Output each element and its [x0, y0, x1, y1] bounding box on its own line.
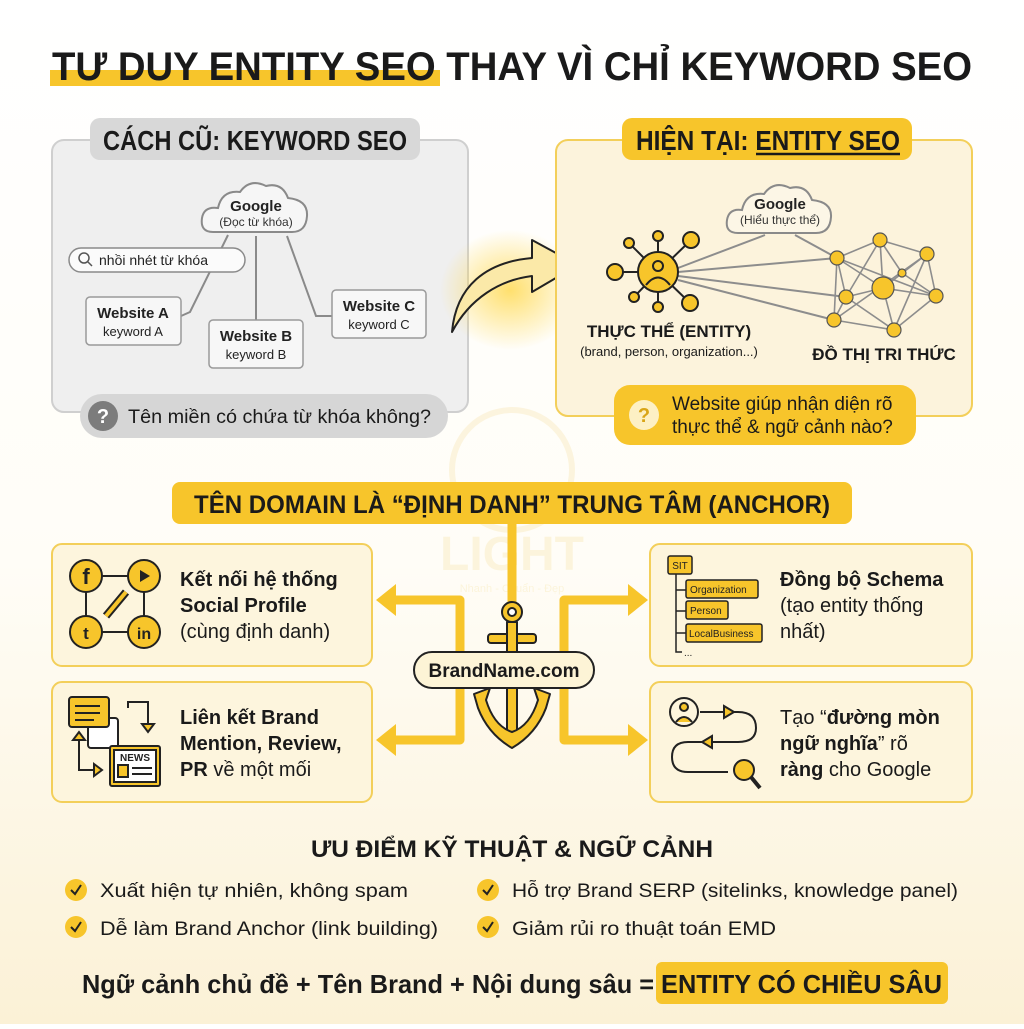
heading: advantages: ƯU ĐIỂM KỸ THUẬT & NGỮ CẢNH [311, 834, 713, 863]
question pill: new: thực thể & ngữ cảnh nào? [672, 417, 893, 438]
icon: mentions news [69, 697, 160, 786]
icon: schema tree: SIT [672, 561, 688, 572]
card: social profiles: Kết nối hệ thống [180, 569, 338, 591]
card: semantic trail: ràng cho Google [780, 759, 931, 781]
title: TƯ DUY ENTITY SEO THAY VÌ CHỈ KEYWORD SEO [52, 43, 972, 89]
label: entity: (brand, person, organization...) [580, 344, 758, 359]
card: social profiles [52, 544, 372, 666]
icon: social network: f [82, 564, 90, 589]
checklist [65, 879, 958, 940]
connectors: anchor arrows [392, 522, 632, 740]
heading: entity SEO [622, 118, 912, 160]
icon: schema tree: Person [690, 606, 722, 617]
card: schema [650, 544, 972, 666]
website C: keyword C [348, 317, 410, 332]
question pill: new [614, 385, 916, 445]
question pill: old: Tên miền có chứa từ khóa không? [128, 407, 431, 428]
card: social profiles: Social Profile [180, 595, 307, 617]
card: semantic trail: ngữ nghĩa” rõ [780, 733, 908, 755]
card: semantic trail: Tạo “đường mòn [780, 707, 940, 729]
knowledge graph [827, 233, 943, 337]
card: brand mentions: Mention, Review, [180, 733, 342, 755]
icon: entity node [607, 231, 699, 312]
icon: google cloud entity: (Hiểu thực thể) [740, 213, 820, 227]
icon: anchor [474, 602, 550, 748]
card: schema: Đồng bộ Schema [780, 569, 944, 591]
heading: entity SEO: HIỆN TẠI: ENTITY SEO [636, 125, 900, 156]
icon: google cloud: Google [230, 198, 282, 215]
brand pill [414, 652, 594, 688]
website A: keyword A [103, 324, 163, 339]
panel: old keyword SEO [52, 118, 468, 438]
watermark [440, 410, 584, 595]
icon: social network: t [83, 624, 89, 643]
lines entity to graph [678, 235, 846, 320]
icon: schema tree [668, 556, 762, 659]
website C [332, 290, 426, 338]
icon: google cloud [202, 183, 307, 232]
connector lines [181, 235, 332, 320]
checklist: Xuất hiện tự nhiên, không spam [100, 881, 408, 902]
icon: mentions news: NEWS [120, 753, 150, 764]
website A [86, 297, 181, 345]
card: social profiles: (cùng định danh) [180, 621, 330, 643]
icon: social network [70, 560, 160, 648]
checklist: Dễ làm Brand Anchor (link building) [100, 918, 438, 940]
heading: old way [90, 118, 420, 160]
card: schema: nhất) [780, 621, 826, 643]
label: entity: THỰC THỂ (ENTITY) [587, 322, 751, 341]
icon: social network: in [137, 626, 151, 643]
icon: schema tree: ... [684, 648, 692, 659]
icon: schema tree: Organization [690, 585, 747, 596]
brand pill: BrandName.com [428, 661, 580, 682]
checklist: Giảm rủi ro thuật toán EMD [512, 919, 776, 940]
search bar [69, 248, 245, 272]
panel: entity SEO [556, 118, 972, 445]
website A: Website A [97, 305, 169, 322]
watermark: LIGHT [440, 528, 584, 581]
website B: keyword B [226, 347, 286, 362]
question pill: old: ? [97, 406, 109, 428]
card: brand mentions: PR về một mối [180, 759, 311, 781]
icon: semantic path [670, 698, 760, 788]
website C: Website C [343, 298, 415, 315]
checklist: Hỗ trợ Brand SERP (sitelinks, knowledge panel) [512, 880, 958, 902]
icon: schema tree: LocalBusiness [689, 629, 753, 640]
question pill: new: ? [638, 405, 650, 427]
search bar: nhồi nhét từ khóa [99, 252, 208, 268]
arrow: old to new [440, 230, 580, 350]
card: semantic trail [650, 682, 972, 802]
card: brand mentions: Liên kết Brand [180, 707, 319, 729]
label: knowledge graph: ĐỒ THỊ TRI THỨC [812, 345, 956, 364]
watermark: Nhanh - Chuẩn - Đẹp [460, 583, 564, 595]
question pill: new: Website giúp nhận diện rõ [672, 394, 892, 415]
card: schema: (tạo entity thống [780, 595, 923, 617]
icon: google cloud: (Đọc từ khóa) [219, 215, 293, 229]
heading: old way: CÁCH CŨ: KEYWORD SEO [103, 125, 407, 156]
heading: domain anchor [172, 482, 852, 524]
conclusion formula: Ngữ cảnh chủ đề + Tên Brand + Nội dung sâu = ENTITY CÓ CHIỀU SÂU [82, 969, 942, 999]
icon: google cloud entity: Google [754, 196, 806, 213]
question pill: old [80, 394, 448, 438]
website B: Website B [220, 328, 292, 345]
heading: domain anchor: TÊN DOMAIN LÀ “ĐỊNH DANH” TRUNG TÂM (ANCHOR) [194, 489, 830, 519]
website B [209, 320, 303, 368]
card: brand mentions [52, 682, 372, 802]
label: entity [580, 322, 758, 359]
icon: google cloud entity [727, 185, 831, 233]
